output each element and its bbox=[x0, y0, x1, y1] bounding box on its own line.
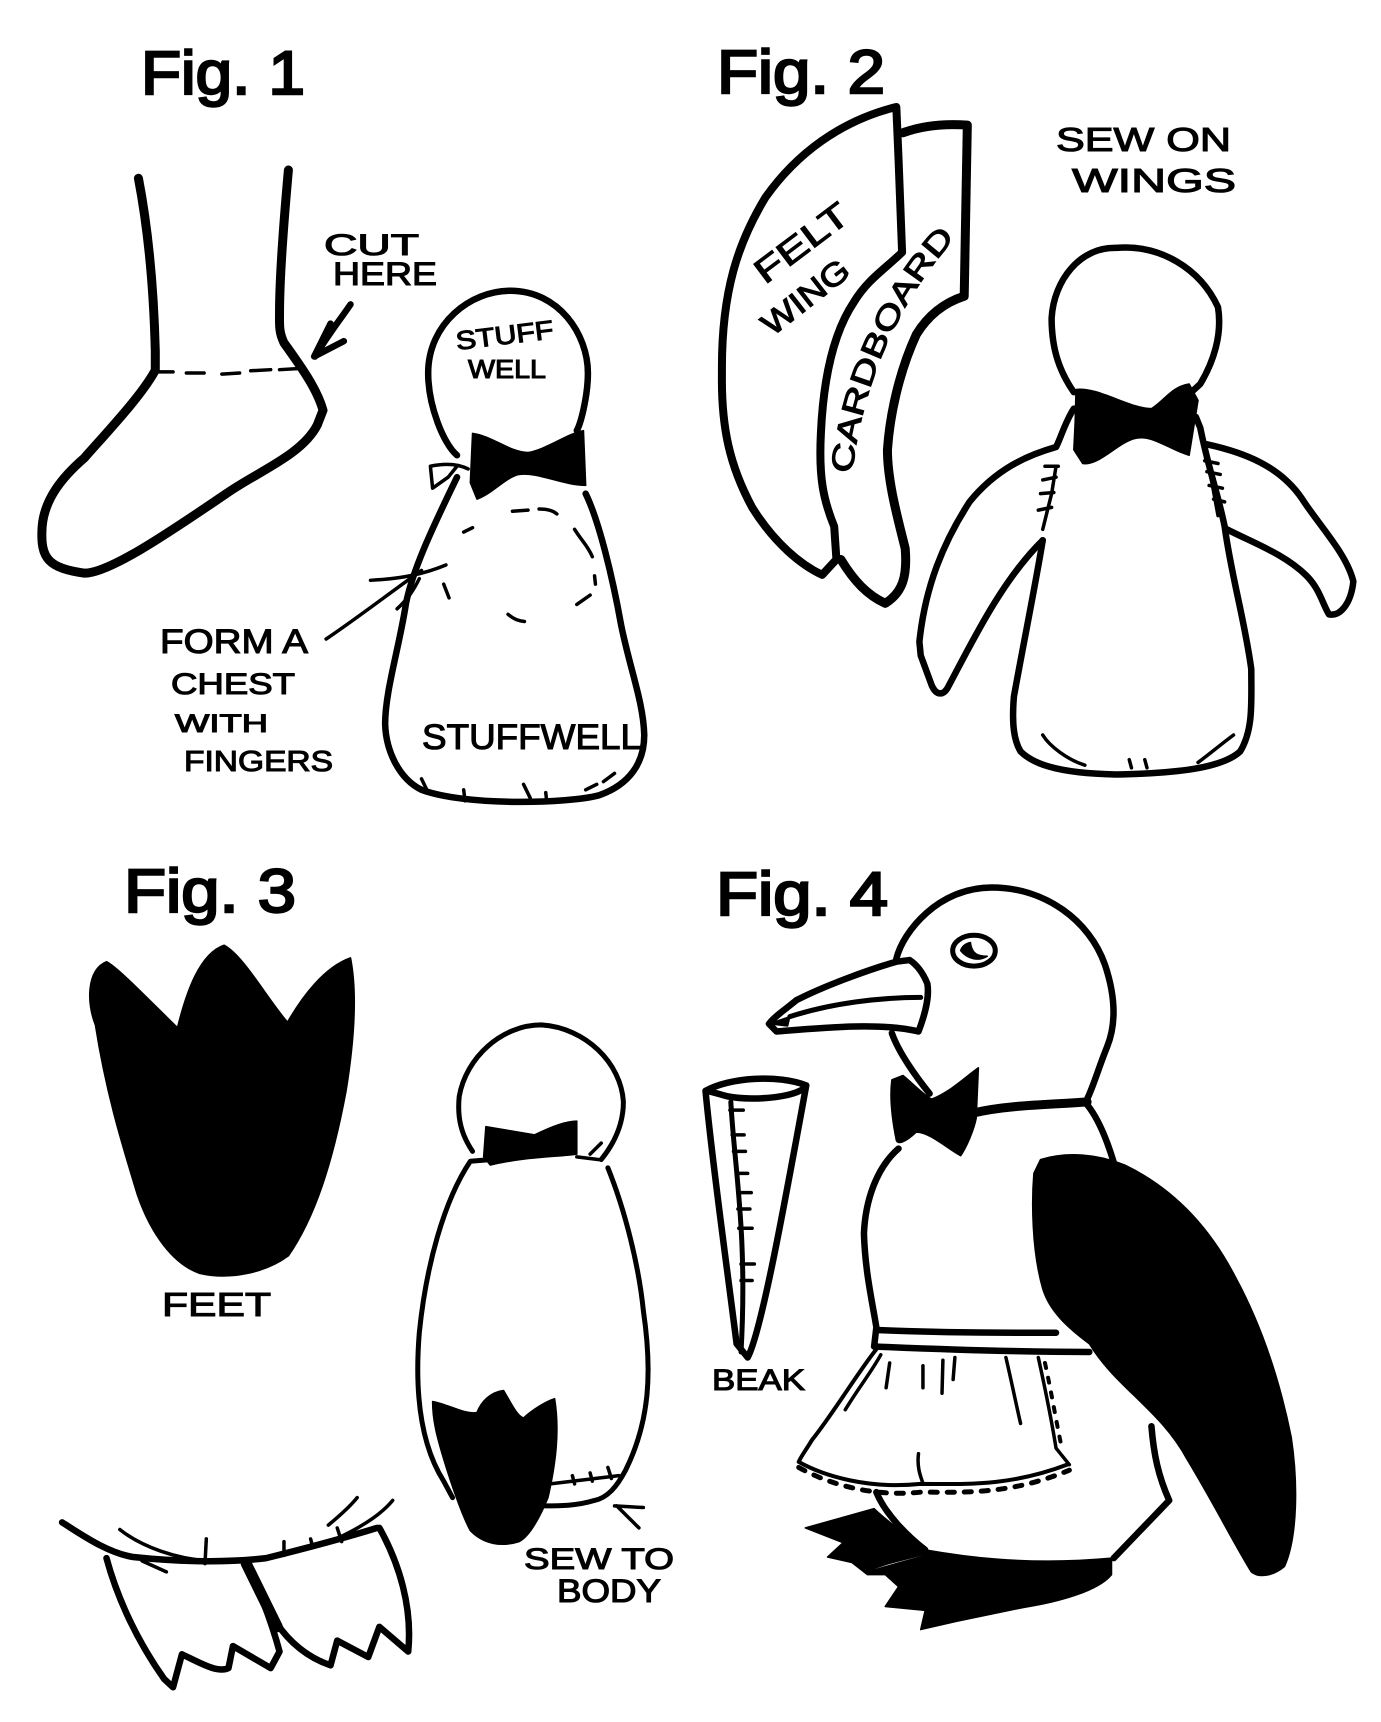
drawing: apron bbox=[799, 1330, 1089, 1493]
label: felt wing bbox=[747, 195, 857, 343]
label: sew on wings: WINGS bbox=[1072, 162, 1236, 199]
drawing: cut socks toes bbox=[62, 1498, 409, 1687]
label: stuff well head bbox=[454, 314, 555, 384]
drawing: black wing bbox=[1033, 1155, 1296, 1575]
drawing: felt wing and cardboard bbox=[722, 107, 967, 603]
heading: Fig. 2: Fig. 2 bbox=[717, 38, 885, 106]
drawing: stuffed body with bow tie bbox=[326, 291, 644, 802]
drawing: sock foot bbox=[42, 170, 351, 573]
drawing: beak bbox=[769, 960, 928, 1032]
drawing: black felt foot bbox=[90, 945, 354, 1276]
label: form a chest with fingers bbox=[160, 623, 333, 778]
label: cardboard: CARDBOARD bbox=[832, 229, 950, 472]
label: feet: FEET bbox=[162, 1286, 271, 1323]
label: felt wing: FELT bbox=[747, 195, 857, 291]
label: sew to body: BODY bbox=[557, 1573, 661, 1609]
heading: Fig. 1: Fig. 1 bbox=[141, 39, 305, 107]
label: stuff well head: STUFF bbox=[454, 314, 555, 356]
label: cut here: CUT bbox=[324, 229, 419, 262]
label: cut here bbox=[324, 229, 437, 292]
label: stuff well base: STUFFWELL bbox=[422, 718, 641, 757]
label: form a chest with fingers: CHEST bbox=[171, 668, 295, 701]
drawing: penguin body with wings bbox=[919, 248, 1353, 774]
label: sew to body: SEW TO bbox=[524, 1543, 674, 1576]
drawing: bow tie bbox=[891, 1068, 978, 1156]
drawing: penguin body with foot sewn on bbox=[418, 1025, 648, 1544]
label: form a chest with fingers: FORM A bbox=[160, 623, 308, 661]
label: beak: BEAK bbox=[712, 1364, 805, 1397]
heading: Fig. 3: Fig. 3 bbox=[124, 857, 296, 925]
label: felt wing: WING bbox=[754, 251, 857, 343]
label: form a chest with fingers: WITH bbox=[175, 710, 268, 738]
panel: figure 4 bbox=[706, 860, 1296, 1630]
panel: figure 2 bbox=[717, 38, 1357, 778]
drawing: finished penguin bbox=[769, 887, 1296, 1630]
label: sew on wings: SEW ON bbox=[1056, 121, 1231, 158]
label: sew to body bbox=[524, 1543, 674, 1609]
label: stuff well head: WELL bbox=[468, 354, 546, 384]
label: sew on wings bbox=[1056, 121, 1236, 199]
drawing: black feet bbox=[805, 1509, 1112, 1630]
heading: Fig. 4: Fig. 4 bbox=[716, 860, 888, 928]
panel: figure 3 bbox=[62, 857, 674, 1687]
drawing: sewn beak cone bbox=[706, 1079, 806, 1357]
icon: eye bbox=[953, 935, 995, 966]
label: cut here: HERE bbox=[333, 256, 437, 292]
panel: figure 1 bbox=[42, 39, 644, 802]
label: form a chest with fingers: FINGERS bbox=[184, 746, 333, 778]
